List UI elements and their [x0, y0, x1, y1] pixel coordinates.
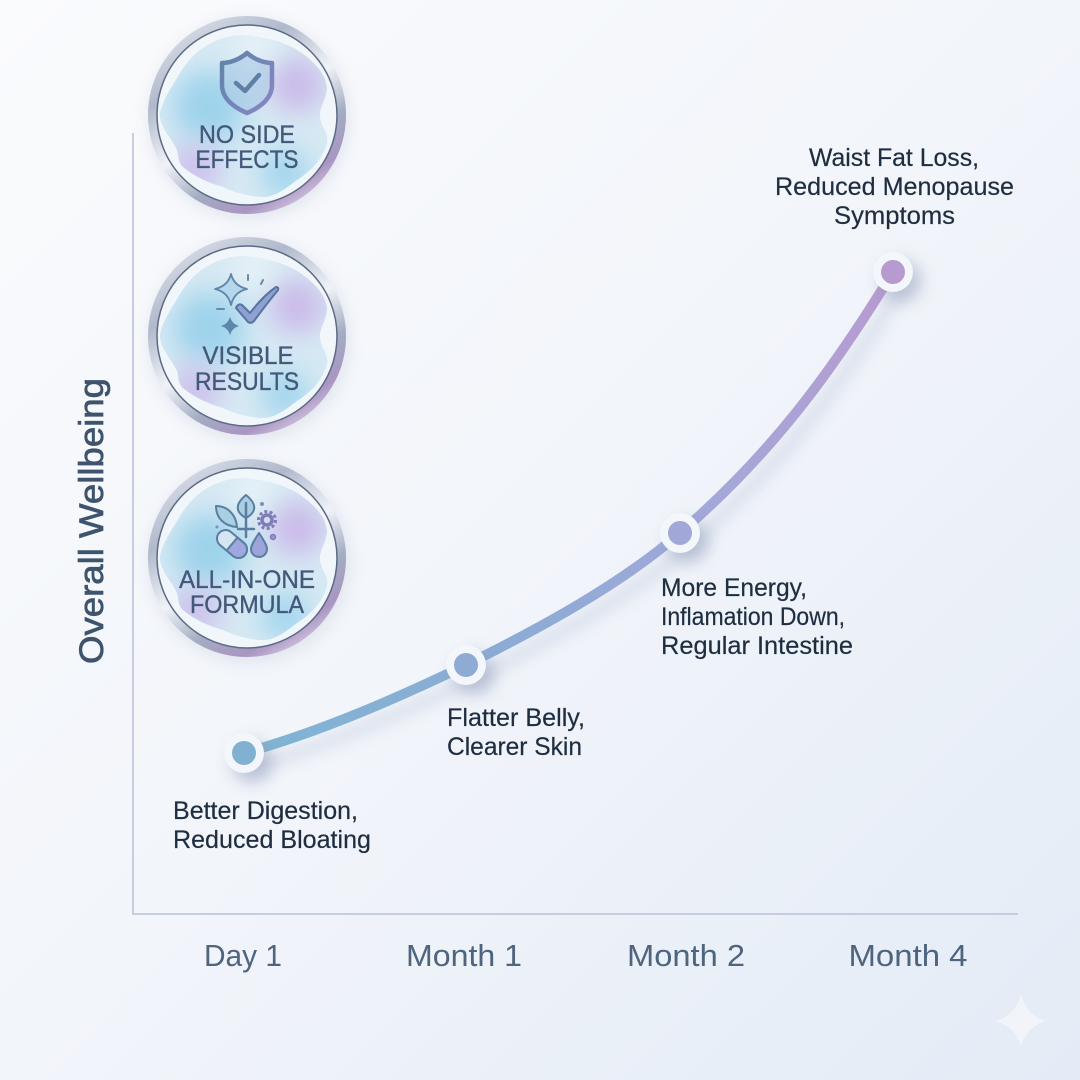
icon: corner sparkle [996, 995, 1046, 1046]
badge: no side effects [148, 16, 349, 219]
y axis title: Overall Wellbeing [73, 378, 111, 664]
badge label [195, 342, 299, 396]
badge label [179, 566, 315, 619]
point: month 2 [660, 513, 709, 563]
label: month 4 [775, 144, 1014, 230]
badge label: FORMULA [190, 591, 304, 619]
watercolor wash [160, 478, 328, 640]
badge label: ALL-IN-ONE [179, 566, 315, 594]
badge label: RESULTS [195, 368, 299, 396]
x axis label: month 1: Month 1 [406, 938, 522, 973]
label: day 1: Reduced Bloating [173, 826, 371, 854]
label: month 2: Regular Intestine [661, 632, 853, 660]
icon: sparkles with check [215, 274, 278, 335]
point: day 1 [224, 733, 273, 783]
watercolor wash [160, 256, 328, 418]
label: month 4: Waist Fat Loss, [809, 144, 979, 172]
label: month 4: Symptoms [834, 202, 955, 230]
label: month 2 [661, 574, 853, 660]
x axis label: month 4: Month 4 [848, 938, 968, 973]
point: month 1 [446, 645, 495, 695]
point: month 4 [873, 252, 922, 302]
label: month 4: Reduced Menopause [775, 173, 1014, 201]
x axis label: month 2: Month 2 [627, 938, 745, 973]
curve shadow [248, 287, 901, 768]
badge label: EFFECTS [196, 146, 298, 174]
icon: leaves, capsule, drop and gear [214, 495, 276, 561]
badge: all-in-one formula [148, 459, 349, 662]
growth curve [244, 272, 893, 753]
x axis label: day 1: Day 1 [204, 938, 282, 973]
badge: visible results [148, 237, 349, 440]
icon: shield with check [222, 53, 272, 113]
label: month 2: More Energy, [661, 574, 807, 602]
label: month 1: Clearer Skin [447, 733, 582, 761]
label: month 1: Flatter Belly, [447, 704, 585, 732]
y axis [132, 133, 134, 914]
watercolor wash [160, 35, 328, 197]
label: month 2: Inflamation Down, [661, 603, 845, 631]
badge label: VISIBLE [202, 342, 294, 370]
badge label: NO SIDE [199, 121, 295, 149]
x axis [132, 913, 1018, 915]
label: month 1 [447, 704, 585, 761]
label: day 1 [173, 797, 371, 854]
badge label [196, 121, 298, 174]
label: day 1: Better Digestion, [173, 797, 358, 825]
